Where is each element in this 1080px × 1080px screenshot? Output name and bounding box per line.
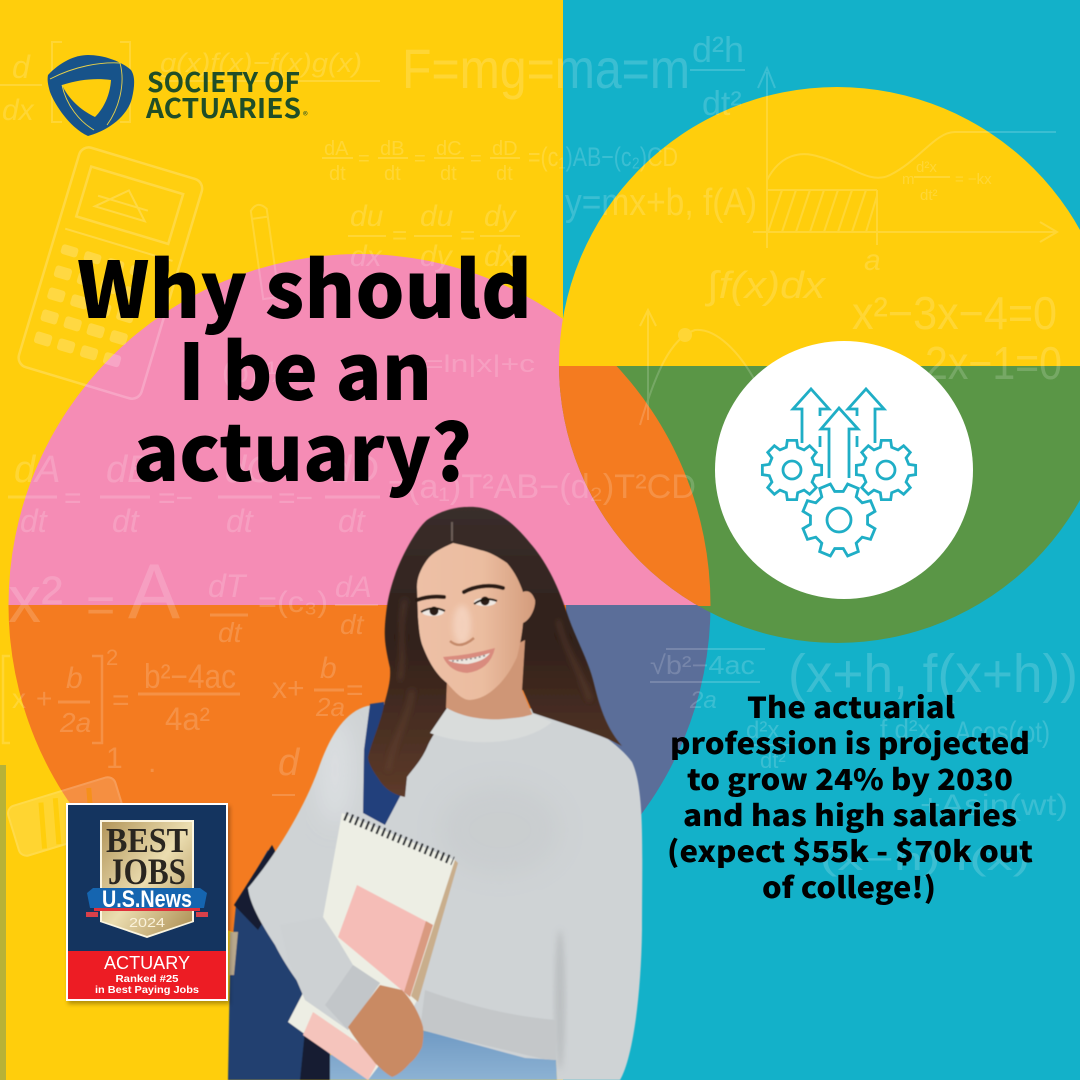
notebook spiral bbox=[345, 816, 453, 861]
chalk math doodles: dt bbox=[218, 617, 243, 648]
chalk math doodles: dy bbox=[420, 240, 454, 273]
chalk math doodles: dt bbox=[329, 163, 346, 185]
chalk math doodles: dt² bbox=[920, 187, 938, 204]
blue ribbon bbox=[87, 888, 207, 908]
badge ranking text bbox=[95, 953, 199, 996]
forearm sleeve bbox=[280, 917, 380, 1030]
chalk math doodles: = bbox=[346, 674, 364, 707]
chalk math doodles: = bbox=[392, 220, 407, 250]
chalk math doodles: = bbox=[86, 577, 115, 633]
chalk math doodles: dA bbox=[14, 449, 60, 491]
chalk math doodles: 2a bbox=[315, 692, 345, 722]
chalk math doodles: 1 bbox=[106, 742, 123, 775]
chalk math doodles: = bbox=[112, 684, 130, 717]
chalk math doodles: + bbox=[36, 683, 52, 714]
chalk math doodles: . bbox=[148, 746, 156, 779]
chalk math doodles: 2a bbox=[59, 707, 91, 738]
chalk math doodles: g(x)f(x)−f(x)g(x) bbox=[160, 48, 362, 78]
face shading bbox=[453, 605, 471, 645]
chalk math doodles: (b) ½ bbox=[222, 356, 292, 389]
sleeve cuff ribbing bbox=[325, 965, 380, 1030]
bottom gear bbox=[791, 472, 887, 568]
badge ranking text: Ranked #25 bbox=[116, 973, 179, 985]
chalk math doodles: = −kx bbox=[955, 171, 992, 188]
chalk math doodles: dx bbox=[350, 240, 383, 273]
badge: US News Best Jobs 2024 bbox=[66, 803, 230, 1004]
icon: calculator doodle bbox=[16, 145, 205, 401]
chalk math doodles: = bbox=[358, 148, 370, 170]
chalk math doodles: dB bbox=[380, 138, 404, 160]
icon: lower calculator doodle bbox=[6, 775, 128, 858]
chalk math doodles: dt bbox=[440, 163, 457, 185]
hair bbox=[368, 507, 622, 797]
left circle: pink, orange and slate quadrants bbox=[0, 250, 726, 965]
backpack dark lower bbox=[300, 1030, 330, 1080]
notebook edge bbox=[411, 860, 458, 1002]
chalk math doodles: = bbox=[460, 220, 475, 250]
chalk math doodles: b bbox=[320, 652, 337, 685]
chalk math doodles: f d²x bbox=[880, 714, 931, 744]
chalk math doodles: dA bbox=[324, 138, 349, 160]
chalk math doodles: x+ bbox=[272, 672, 305, 705]
sweater bbox=[248, 703, 642, 1080]
body text bbox=[667, 685, 1033, 907]
chalk math doodles bbox=[0, 29, 1078, 877]
chalk math doodles: dT bbox=[208, 568, 248, 604]
chalk math doodles: dC bbox=[436, 138, 462, 160]
logo: Society of Actuaries bbox=[48, 55, 308, 136]
chalk math doodles: =(c₃) bbox=[258, 586, 328, 619]
icon: gears and arrows bbox=[762, 389, 916, 568]
right arrow bbox=[848, 389, 884, 447]
body text: profession is projected bbox=[670, 721, 1030, 763]
pink book bbox=[338, 885, 433, 997]
chalk math doodles: F=mg=ma=m bbox=[402, 37, 690, 100]
title: actuary? bbox=[133, 392, 472, 504]
left arrow bbox=[793, 389, 829, 447]
chalk math doodles: d²x bbox=[916, 159, 937, 176]
chalk math doodles: A bbox=[128, 547, 180, 635]
chalk math doodles: m bbox=[902, 171, 914, 188]
neck bbox=[446, 640, 533, 722]
chalk math doodles: dD bbox=[330, 449, 379, 491]
chalk math doodles: dt bbox=[340, 609, 365, 640]
chalk math doodles: dt bbox=[496, 163, 513, 185]
lower pink cover bbox=[303, 1012, 380, 1080]
chalk math doodles: = bbox=[414, 148, 426, 170]
right gear bbox=[856, 440, 916, 500]
gold shield bbox=[100, 820, 194, 938]
body text: (expect $55k - $70k out bbox=[667, 829, 1033, 871]
chalk math doodles: 4a² bbox=[165, 701, 210, 737]
chalk math doodles: =(c₁)AB−(c₂)CD bbox=[528, 142, 678, 172]
chalk math doodles: +Asin(wt) bbox=[920, 789, 1068, 822]
white circle bbox=[715, 341, 973, 599]
chalk math doodles: dC bbox=[225, 449, 274, 491]
body text: The actuarial bbox=[747, 685, 955, 727]
center arrow bbox=[821, 408, 858, 478]
best jobs wordmark bbox=[106, 821, 188, 893]
body text: of college!) bbox=[762, 865, 936, 907]
face bbox=[417, 543, 535, 700]
badge ranking text: ACTUARY bbox=[104, 953, 190, 973]
chalk math doodles: dx bbox=[484, 240, 517, 273]
chalk math doodles: =(a₁)T²AB−(d₂)T²CD bbox=[388, 468, 696, 506]
chalk math doodles: du bbox=[350, 200, 384, 233]
chalk math doodles: dt bbox=[226, 503, 254, 539]
chalk math doodles: = bbox=[64, 482, 82, 515]
chalk math doodles: dt bbox=[384, 163, 401, 185]
chalk math doodles: dA bbox=[335, 571, 372, 604]
hair highlights bbox=[388, 600, 590, 770]
logo wordmark: ACTUARIES bbox=[145, 87, 301, 126]
chalk math doodles: (x−h) f(x) bbox=[820, 841, 1030, 877]
backpack dark upper bbox=[234, 845, 290, 930]
chalk math doodles: =ln|x|+c bbox=[425, 351, 535, 378]
chalk math doodles: =− bbox=[158, 482, 193, 515]
chalk math doodles: x bbox=[12, 683, 26, 714]
hair parting bbox=[451, 522, 453, 541]
right circle: yellow upper half and green lower half bbox=[555, 85, 1080, 646]
chalk math doodles: 2x−1=0 bbox=[925, 337, 1062, 389]
title: Why should bbox=[77, 229, 532, 341]
backpack strap bbox=[363, 702, 405, 825]
olive strip on left edge bbox=[0, 765, 6, 1080]
badge year: 2024 bbox=[129, 915, 165, 930]
logo wordmark bbox=[145, 61, 308, 126]
chalk math doodles: b²−4ac bbox=[144, 658, 236, 696]
sweater collar bbox=[430, 708, 552, 742]
chalk math doodles: dD bbox=[492, 138, 518, 160]
nose bbox=[450, 638, 474, 645]
body text: to grow 24% by 2030 bbox=[687, 757, 1013, 799]
chalk math doodles: dt² bbox=[702, 85, 742, 123]
chalk math doodles: dx bbox=[2, 94, 35, 127]
chalk math doodles: a bbox=[864, 244, 881, 277]
backpack bbox=[228, 850, 330, 1080]
chalk math doodles: dt bbox=[338, 503, 366, 539]
chalk math doodles: √b²−4ac bbox=[650, 650, 755, 680]
chalk math doodles: =− bbox=[278, 482, 313, 515]
left gear bbox=[762, 440, 822, 500]
chalk math doodles: Acos(ωt) bbox=[955, 716, 1050, 749]
chalk math doodles: d bbox=[278, 742, 301, 784]
logo wordmark: SOCIETY OF bbox=[147, 61, 300, 100]
chalk math doodles: 2a bbox=[689, 687, 717, 714]
chalk math doodles: y=mx+b, f(A) bbox=[565, 182, 757, 224]
background: teal right panel bbox=[563, 0, 1080, 1080]
logo wordmark: ® bbox=[303, 107, 308, 122]
pink book spine bbox=[404, 921, 433, 997]
smile with braces bbox=[443, 648, 495, 673]
chalk math doodles: x² bbox=[8, 562, 63, 636]
chalk math doodles: d²x bbox=[746, 717, 779, 744]
title bbox=[77, 229, 532, 504]
chalk math doodles: dy bbox=[484, 200, 518, 233]
badge ranking text: in Best Paying Jobs bbox=[95, 984, 199, 996]
jeans bbox=[330, 1030, 557, 1080]
us news wordmark: U.S.News bbox=[102, 886, 192, 913]
notebook bbox=[288, 813, 455, 1080]
best jobs wordmark: BEST bbox=[106, 821, 188, 860]
hand bbox=[348, 985, 423, 1077]
chalk math doodles: d bbox=[12, 49, 31, 85]
backpack side strap bbox=[229, 932, 238, 975]
eyes bbox=[421, 596, 497, 616]
chalk math doodles: 2 bbox=[106, 645, 118, 670]
chalk math doodles: (x+h, f(x+h)) bbox=[788, 644, 1078, 704]
chalk math doodles: = bbox=[470, 148, 482, 170]
icon: logo shield bbox=[48, 55, 134, 136]
photo: smiling student with notebook bbox=[228, 507, 642, 1080]
eyebrows bbox=[417, 586, 503, 600]
chalk math doodles: x²−3x−4=0 bbox=[852, 287, 1057, 339]
chalk math doodles: b bbox=[66, 662, 83, 695]
body text: and has high salaries bbox=[683, 793, 1017, 835]
chalk math doodles: du bbox=[420, 200, 454, 233]
chalk math doodles: dt bbox=[20, 503, 48, 539]
chalk math doodles: dt² bbox=[760, 748, 786, 773]
title: I be an bbox=[178, 311, 432, 423]
icon: pencil doodle bbox=[250, 204, 279, 299]
sweater shading bbox=[317, 715, 565, 1070]
background: yellow left panel bbox=[0, 0, 563, 1080]
chalk math doodles: dt bbox=[112, 503, 140, 539]
chalk math doodles: d²h bbox=[692, 29, 744, 70]
chalk math doodles: dB bbox=[106, 449, 152, 491]
chalk math doodles: ∫f(x)dx bbox=[705, 265, 827, 307]
best jobs wordmark: JOBS bbox=[108, 852, 186, 893]
